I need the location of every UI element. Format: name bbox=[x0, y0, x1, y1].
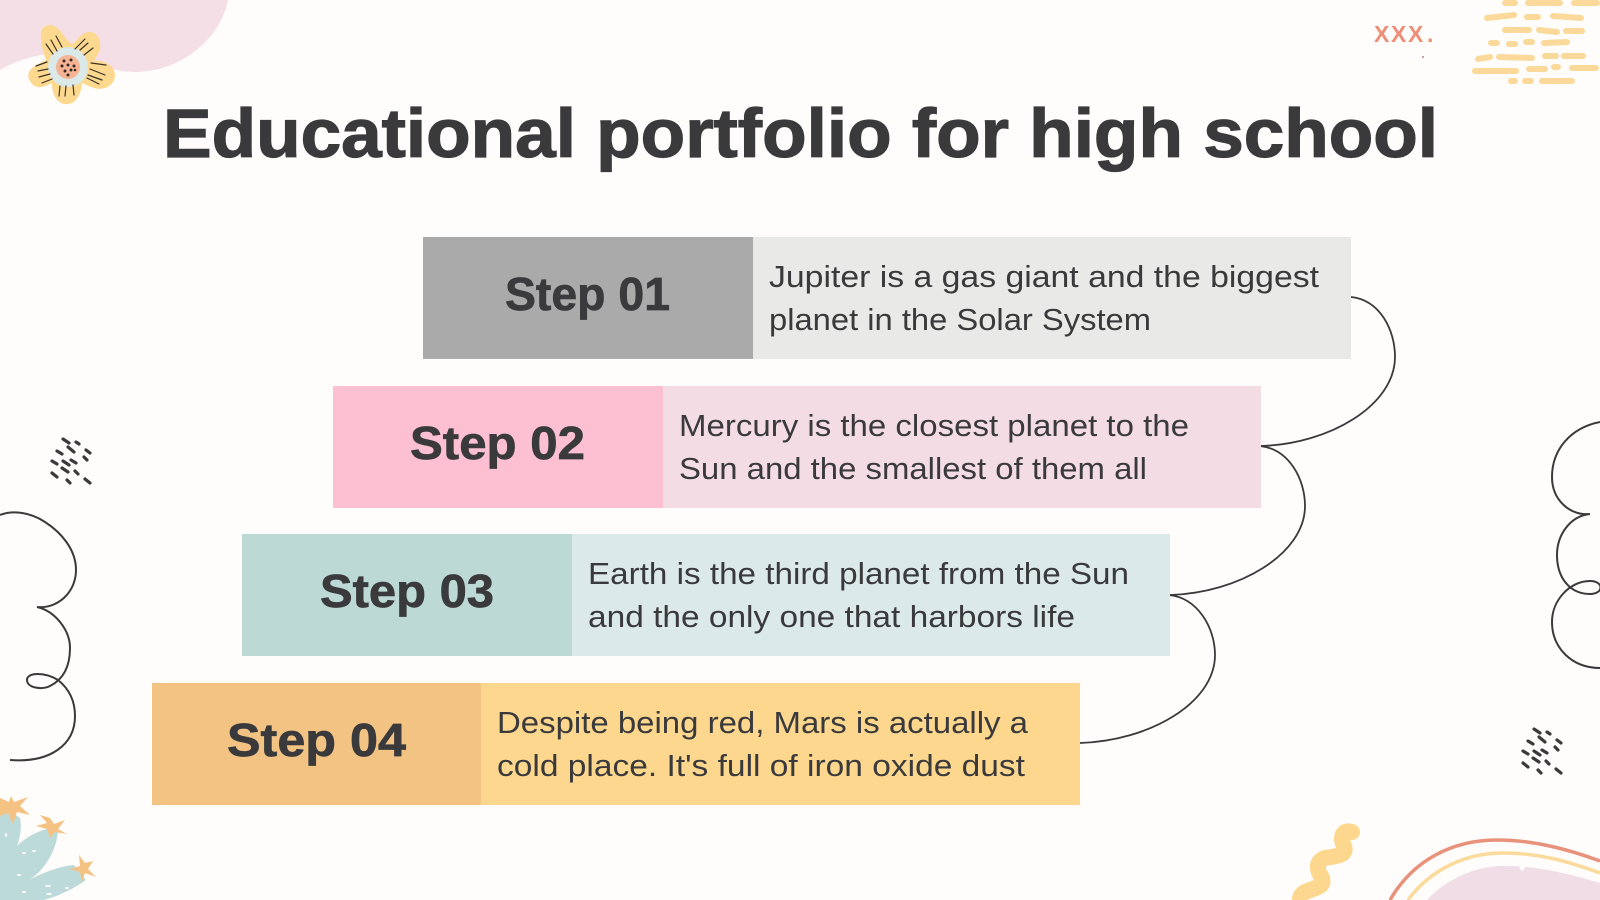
decorative yellow dashes bbox=[1475, 3, 1597, 81]
decorative xxx mark: XXX. bbox=[1374, 21, 1433, 47]
step 01 description: planet in the Solar System bbox=[769, 302, 1151, 337]
step 01 label: Step 01 bbox=[505, 268, 670, 320]
step 02 description: Sun and the smallest of them all bbox=[679, 451, 1147, 486]
step 03 label: Step 03 bbox=[320, 565, 494, 617]
icon: flower bbox=[28, 25, 115, 104]
step 04 description: Despite being red, Mars is actually a bbox=[497, 705, 1029, 740]
panel: step 03 bbox=[242, 534, 1170, 656]
right dash pattern bbox=[1523, 729, 1561, 773]
connector: step 03 to step 04 bbox=[1080, 595, 1215, 743]
yellow wave bbox=[1300, 831, 1352, 900]
left dash pattern bbox=[52, 439, 90, 483]
panel: step 02 bbox=[333, 386, 1261, 508]
step 03 description bbox=[588, 556, 1129, 634]
step 04 description: cold place. It's full of iron oxide dust bbox=[497, 748, 1025, 783]
step 03 description: Earth is the third planet from the Sun bbox=[588, 556, 1129, 591]
rainbow bottom right bbox=[1390, 840, 1600, 900]
panel: step 01 bbox=[423, 237, 1351, 359]
step 01 description bbox=[769, 259, 1319, 337]
step 04 description bbox=[497, 705, 1029, 783]
step 01 description: Jupiter is a gas giant and the biggest bbox=[769, 259, 1319, 294]
step 02 description bbox=[679, 408, 1189, 486]
connector: step 02 to step 03 bbox=[1170, 446, 1305, 595]
title: Educational portfolio for high school bbox=[163, 95, 1438, 172]
connector: step 01 to step 02 bbox=[1261, 297, 1395, 446]
left squiggle bbox=[0, 512, 76, 760]
step 03 description: and the only one that harbors life bbox=[588, 599, 1075, 634]
decorative pink blob top left bbox=[0, 0, 228, 72]
panel: step 04 bbox=[152, 683, 1080, 805]
right squiggle bbox=[1552, 422, 1600, 668]
plant bottom left bbox=[0, 796, 96, 900]
step 04 label: Step 04 bbox=[227, 714, 406, 766]
step 02 description: Mercury is the closest planet to the bbox=[679, 408, 1189, 443]
step 02 label: Step 02 bbox=[410, 417, 585, 469]
